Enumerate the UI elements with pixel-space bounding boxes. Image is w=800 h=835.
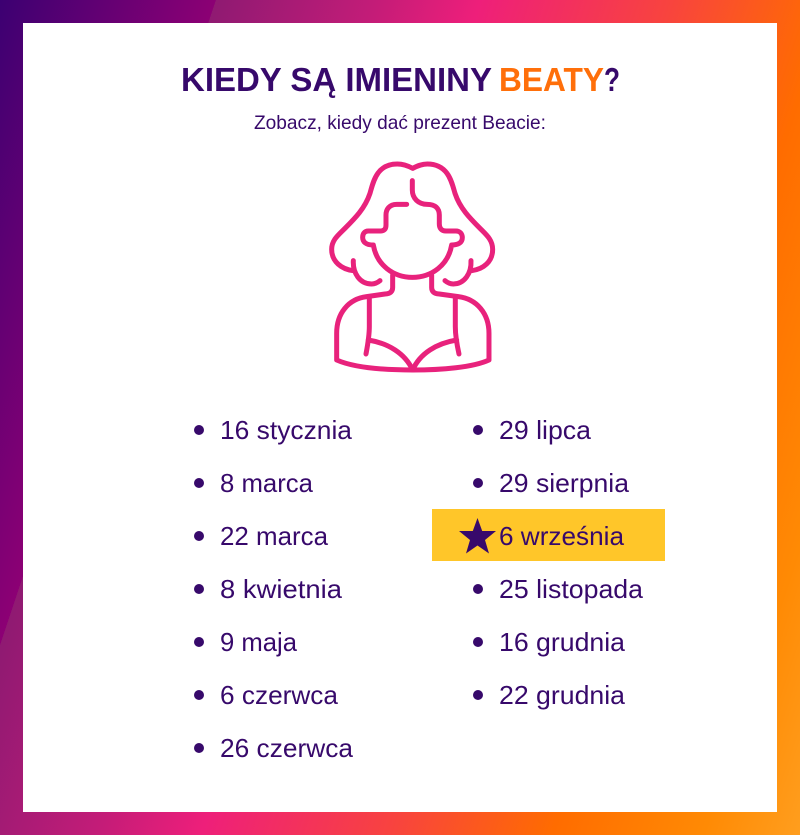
icon: star <box>459 518 496 554</box>
date item: 22 grudnia <box>499 680 626 710</box>
date item: 22 marca <box>220 521 329 551</box>
date item: 8 kwietnia <box>220 574 343 604</box>
date item: 26 czerwca <box>220 733 354 763</box>
highlighted date <box>432 509 665 561</box>
date item: 16 stycznia <box>220 415 353 445</box>
date item: 9 maja <box>220 627 298 657</box>
date item: 6 czerwca <box>220 680 339 710</box>
title: KIEDY SĄ IMIENINY <box>181 61 492 98</box>
subtitle: Zobacz, kiedy dać prezent Beacie: <box>254 112 546 134</box>
icon: woman portrait <box>332 164 493 370</box>
list: left column <box>194 415 354 763</box>
date item: 8 marca <box>220 468 314 498</box>
highlighted date text: 6 września <box>499 521 625 551</box>
date item: 16 grudnia <box>499 627 626 657</box>
list: right column <box>432 415 665 710</box>
date item: 25 listopada <box>499 574 644 604</box>
date item: 29 lipca <box>499 415 592 445</box>
title: BEATY <box>499 61 604 98</box>
title: ? <box>604 61 620 98</box>
date item: 29 sierpnia <box>499 468 630 498</box>
